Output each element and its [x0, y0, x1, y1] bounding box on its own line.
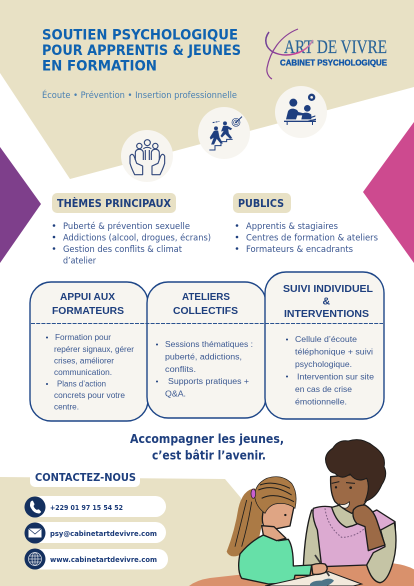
panel: appui aux formateurs: APPUI AUX [60, 291, 115, 303]
logo: ART DE VIVRE [284, 37, 387, 58]
heading tag: thèmes principaux [52, 193, 176, 213]
heading: contactez-nous: CONTACTEZ-NOUS [35, 472, 136, 484]
list: thèmes: d’atelier [63, 256, 96, 266]
panel: suivi individuel et interventions: émotionnelle. [295, 398, 347, 406]
panel: appui aux formateurs: FORMATEURS [52, 305, 124, 317]
panel: ateliers collectifs: Supports pratiques + [168, 377, 249, 386]
panel: appui aux formateurs: communication. [54, 368, 112, 377]
title: POUR APPRENTIS & JEUNES [42, 42, 241, 59]
panel: ateliers collectifs: COLLECTIFS [173, 305, 238, 317]
list: thèmes [53, 221, 211, 266]
logo [266, 29, 387, 79]
panel: appui aux formateurs [30, 282, 148, 421]
panel: ateliers collectifs: puberté, addictions, [165, 352, 242, 362]
panel: suivi individuel et interventions: & [322, 296, 330, 308]
illustration: woman and girl at a table [189, 440, 414, 586]
panel: suivi individuel et interventions: SUIVI INDIVIDUEL [283, 283, 374, 295]
list: publics: Formateurs & encadrants [246, 245, 353, 255]
heading tag: publics: PUBLICS [238, 198, 284, 210]
list: thèmes: Gestion des conflits & climat [63, 245, 182, 255]
icon: counsellor and student at desk [275, 86, 327, 138]
list: publics: Apprentis & stagiaires [246, 222, 338, 232]
tagline: c’est bâtir l’avenir. [152, 448, 266, 462]
title: SOUTIEN PSYCHOLOGIQUE [42, 26, 238, 44]
panel: suivi individuel et interventions: en cas de crise [295, 385, 352, 394]
title: EN FORMATION [42, 58, 157, 74]
panel: suivi individuel et interventions: Cellule d’écoute [295, 335, 357, 344]
woman [303, 440, 396, 583]
panel: ateliers collectifs [147, 282, 266, 418]
icon: hands holding people [121, 130, 173, 182]
panel: appui aux formateurs: crises, améliorer [54, 356, 114, 366]
background: bottom beige shape [0, 477, 241, 586]
background: pink arrow [363, 122, 414, 263]
panel: suivi individuel et interventions: Intervention sur site [297, 372, 374, 382]
subtitle: Écoute • Prévention • Insertion professionnelle [42, 89, 237, 101]
contact: email [24, 522, 166, 544]
icon: climbing figures and target [198, 107, 250, 159]
panel: ateliers collectifs: conflits. [165, 365, 196, 374]
list: thèmes: Puberté & prévention sexuelle [63, 221, 190, 232]
panel: appui aux formateurs: centre. [54, 402, 79, 412]
paper [265, 572, 362, 586]
contact: website [24, 548, 168, 570]
panel: suivi individuel et interventions: INTERVENTIONS [284, 308, 369, 320]
heading tag: thèmes principaux: THÈMES PRINCIPAUX [57, 197, 171, 210]
list: publics [236, 222, 378, 255]
contact: phone [24, 496, 166, 518]
panel: suivi individuel et interventions: psychologique. [295, 360, 352, 369]
panel: appui aux formateurs: repérer signaux, gérer [54, 345, 134, 354]
panel: ateliers collectifs: Sessions thématiques : [165, 340, 253, 349]
background: purple arrow [0, 147, 41, 263]
tagline: Accompagner les jeunes, [130, 431, 284, 446]
notebook blot [310, 579, 334, 586]
girl [227, 477, 312, 584]
heading: contactez-nous [30, 468, 140, 487]
contact: phone: +229 01 97 15 54 52 [50, 504, 123, 512]
panel: ateliers collectifs: ATELIERS [182, 291, 230, 303]
panel: appui aux formateurs: Formation pour [55, 333, 111, 342]
heading tag: publics [233, 193, 291, 213]
list: publics: Centres de formation & ateliers [246, 234, 378, 244]
panel: suivi individuel et interventions: téléphonique + suivi [295, 348, 373, 356]
panel: appui aux formateurs: concrets pour votre [54, 391, 125, 400]
background: top beige shape [0, 0, 414, 179]
panel: ateliers collectifs: Q&A. [165, 390, 186, 398]
panel: suivi individuel et interventions [265, 272, 384, 419]
table [189, 563, 414, 586]
contact: email: psy@cabinetartdevivre.com [50, 530, 157, 538]
logo: CABINET PSYCHOLOGIQUE [280, 58, 387, 68]
panel: appui aux formateurs: Plans d’action [57, 380, 106, 388]
title [42, 26, 241, 74]
list: thèmes: Addictions (alcool, drogues, écrans) [63, 232, 211, 244]
tagline [130, 431, 284, 462]
contact: website: www.cabinetartdevivre.com [50, 556, 157, 564]
hand and pen [312, 555, 329, 576]
